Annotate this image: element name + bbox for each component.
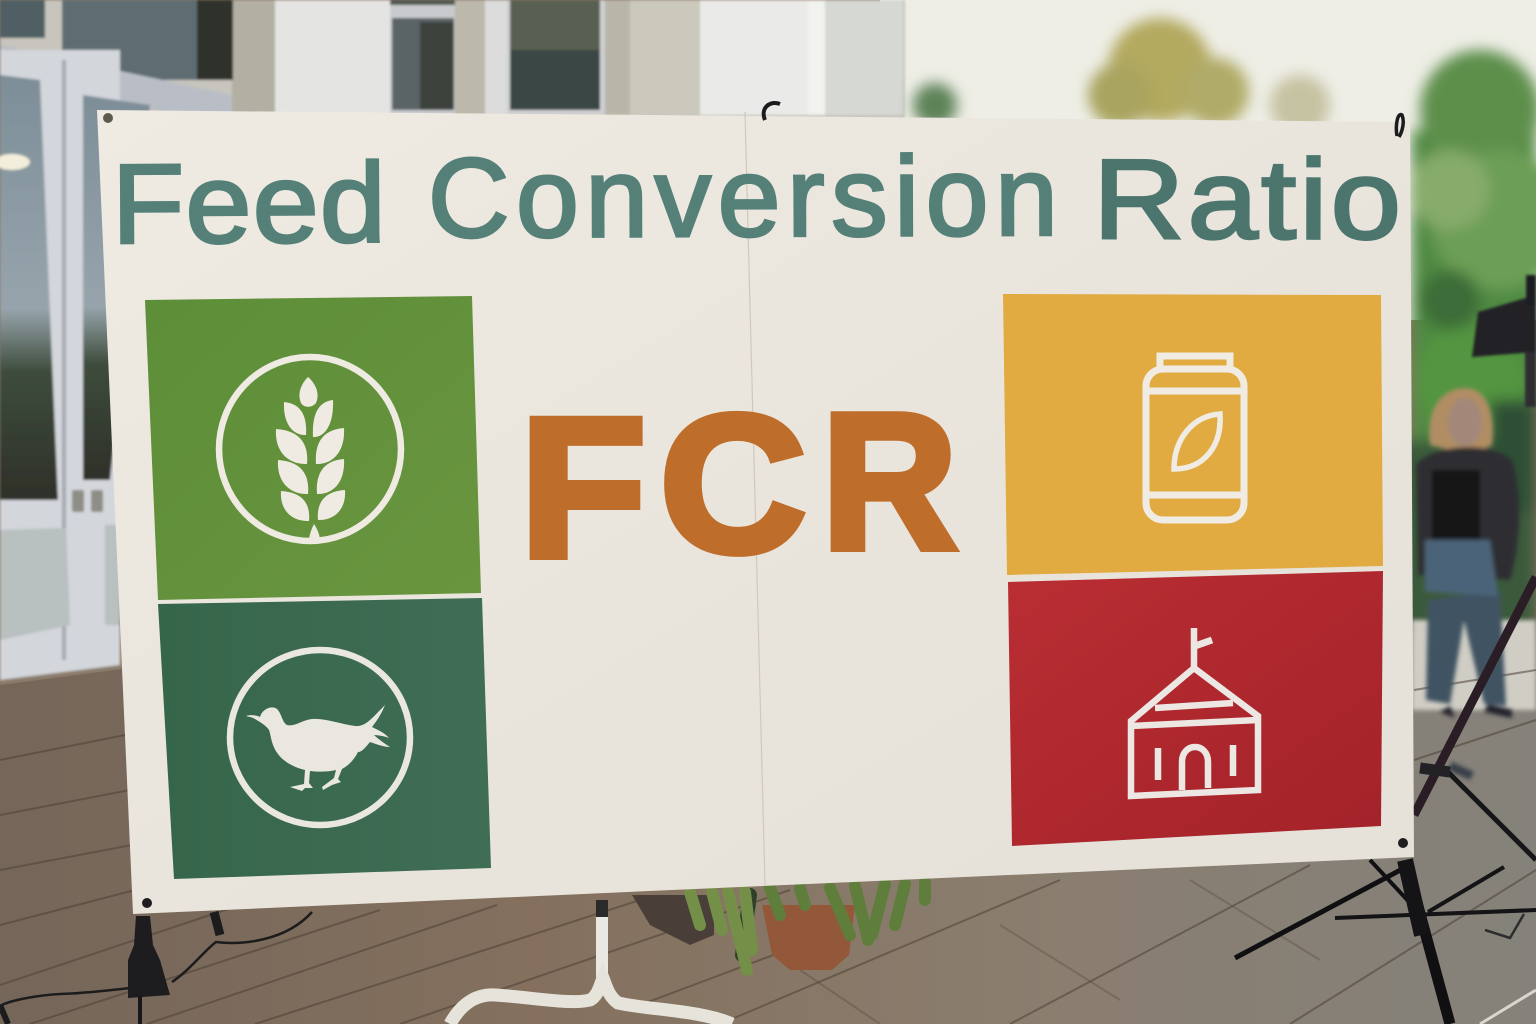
icon: wheat in circle <box>219 357 401 541</box>
title: Feed Conversion Ratio: Ratio <box>1093 136 1401 263</box>
panel: school (red) <box>1008 571 1383 846</box>
photo background: trees <box>913 18 1536 630</box>
tripod right <box>1235 577 1536 1024</box>
heading: FCR: R <box>822 373 957 589</box>
title: Feed Conversion Ratio: Feed <box>111 139 386 267</box>
photo background: wooden deck <box>0 620 1536 1024</box>
door frames <box>0 45 232 130</box>
panel: jar (yellow) <box>1003 294 1383 575</box>
icon: schoolhouse with flag <box>1131 628 1258 796</box>
sign board <box>97 103 1414 914</box>
title: Feed Conversion Ratio: Conversion <box>428 133 1058 261</box>
heading: FCR: C <box>660 375 806 593</box>
sign grommets and clips <box>103 103 1408 908</box>
black stand and cable left <box>0 912 312 1024</box>
video camera <box>1472 275 1536 407</box>
photo background: sky <box>880 0 1536 320</box>
icon: jar with leaf <box>1146 356 1244 520</box>
plant and pots behind sign <box>632 883 925 970</box>
heading: FCR <box>520 373 957 598</box>
icon: bird in circle <box>230 650 410 825</box>
panel: wheat / feed (green) <box>145 296 481 600</box>
white sign stand <box>450 900 732 1024</box>
person in background <box>1416 388 1519 780</box>
photo background: building facade <box>0 0 905 700</box>
title: Feed Conversion Ratio <box>111 133 1401 267</box>
panel: bird (dark green) <box>158 598 491 879</box>
heading: FCR: F <box>520 377 646 598</box>
